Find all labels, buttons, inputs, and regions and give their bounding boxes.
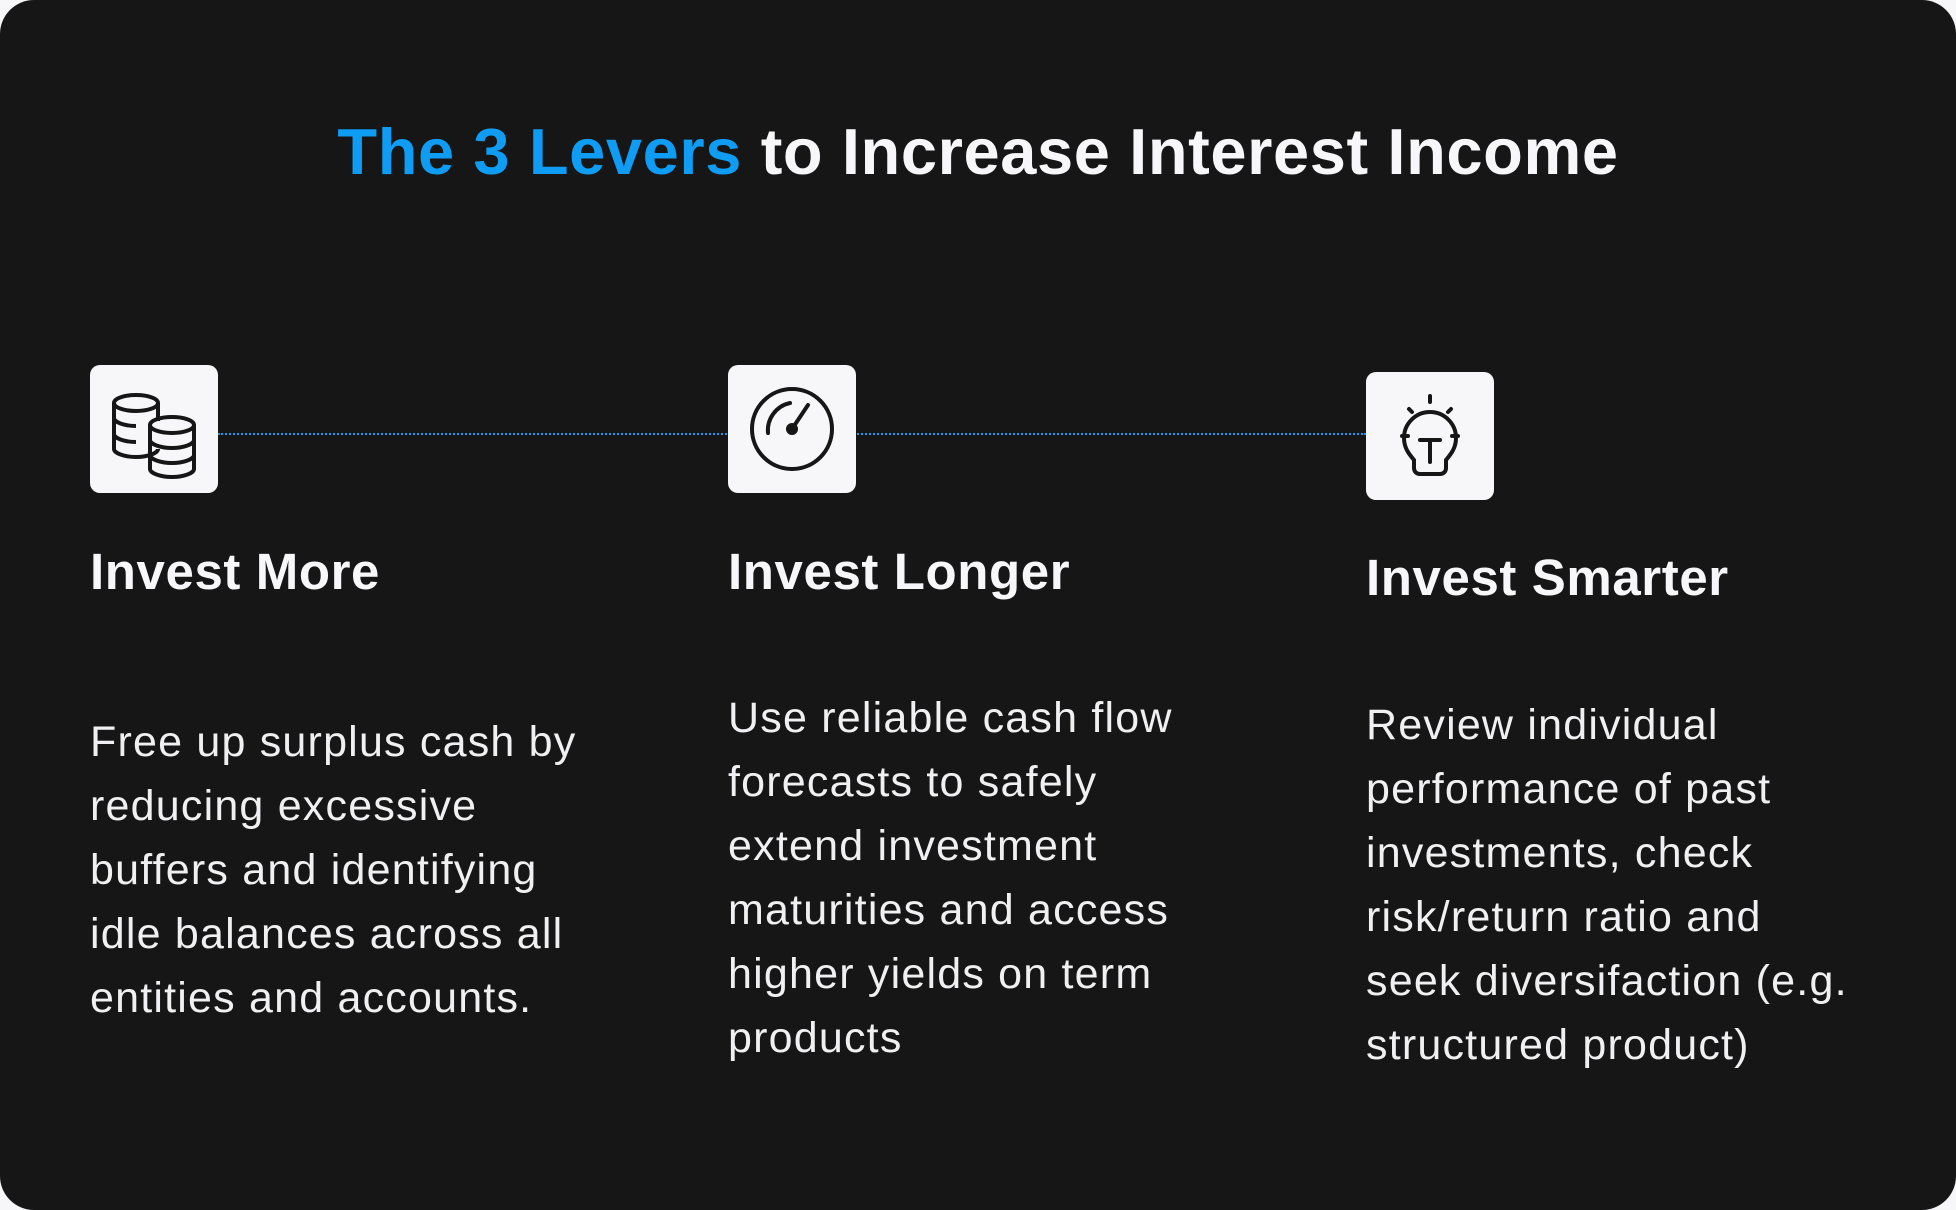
text: invest smarter: investments, check: [1366, 829, 1753, 877]
text: invest more: entities and accounts.: [90, 974, 532, 1022]
text: invest more: reducing excessive: [90, 782, 477, 830]
text: invest smarter: performance of past: [1366, 765, 1771, 813]
text: invest longer: higher yields on term: [728, 950, 1152, 998]
text: invest longer: maturities and access: [728, 886, 1169, 934]
heading: Invest More: Invest More: [90, 543, 380, 600]
text: invest more: buffers and identifying: [90, 846, 538, 894]
text: invest longer: forecasts to safely: [728, 758, 1097, 806]
text: invest longer: products: [728, 1014, 903, 1062]
heading: Invest Longer: Invest Longer: [728, 543, 1070, 600]
icon: coins: [90, 365, 218, 493]
text: invest smarter: structured product): [1366, 1021, 1750, 1069]
icon: gauge: [728, 365, 856, 493]
text: invest longer: [728, 694, 1173, 1062]
text: invest longer: extend investment: [728, 822, 1097, 870]
text: invest smarter: risk/return ratio and: [1366, 893, 1762, 941]
icon: lightbulb: [1366, 372, 1494, 500]
title: The 3 Levers to Increase Interest Income: [337, 115, 1619, 188]
heading: Invest Smarter: Invest Smarter: [1366, 549, 1729, 606]
text: invest more: [90, 718, 576, 1022]
text: invest more: idle balances across all: [90, 910, 563, 958]
connector dotted line: [218, 433, 1366, 435]
text: invest smarter: [1366, 701, 1848, 1069]
text: invest smarter: Review individual: [1366, 701, 1719, 749]
text: invest more: Free up surplus cash by: [90, 718, 576, 766]
text: invest longer: Use reliable cash flow: [728, 694, 1173, 742]
text: invest smarter: seek diversifaction (e.g.: [1366, 957, 1848, 1005]
